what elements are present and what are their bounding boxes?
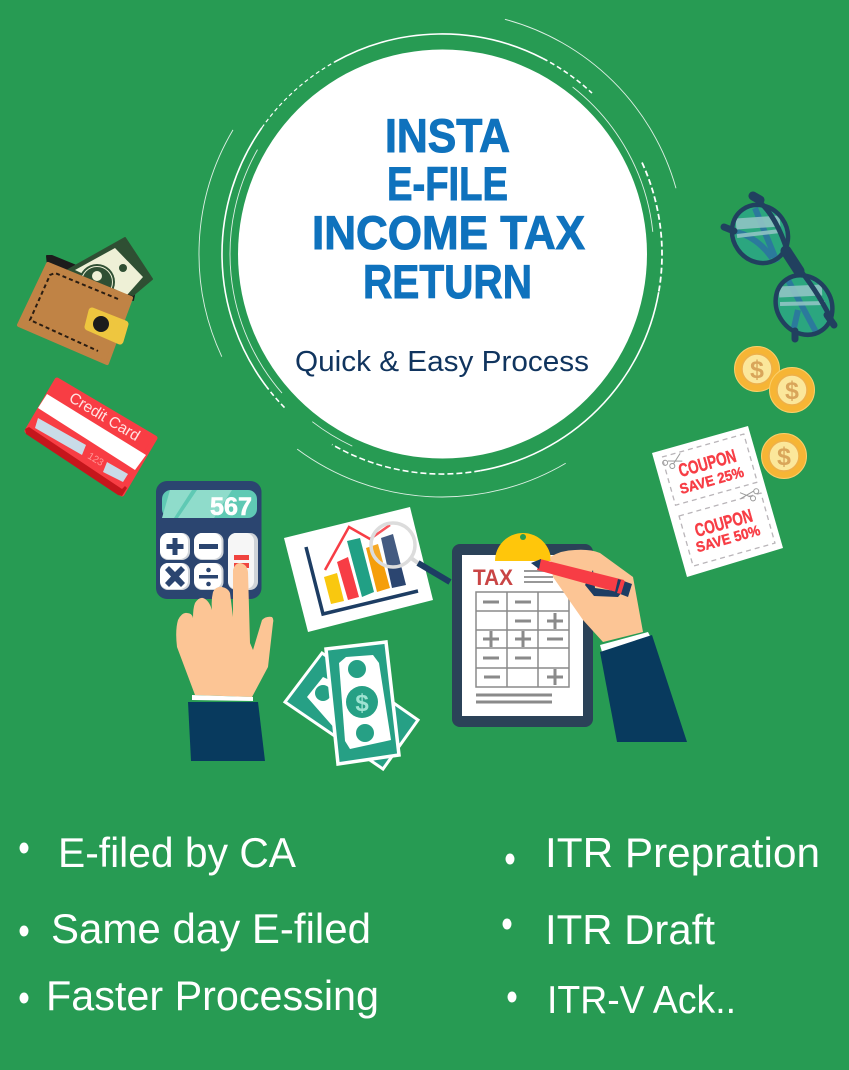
icon: coin three: [762, 434, 806, 478]
feature list: left column: E-filed by CA: [58, 829, 296, 876]
icon: credit card: [25, 380, 155, 496]
feature list: right column: ITR-V Ack..: [547, 979, 736, 1022]
clipboard with tax form: TAX: [473, 565, 513, 590]
title: RETURN: [363, 255, 532, 308]
feature list: left column: [20, 829, 379, 1019]
icon: credit card: 123: [85, 451, 106, 469]
icon: coin two: $: [785, 377, 799, 405]
feature list: left column: Same day E-filed: [51, 905, 371, 952]
hand pressing calculator: [176, 563, 273, 761]
icon: coin one: $: [750, 356, 764, 384]
coupons: SAVE 25%: [678, 465, 746, 498]
central white circle: [238, 50, 647, 458]
feature list: right column: [502, 829, 820, 1022]
banknotes: $: [355, 690, 369, 717]
title: INCOME TAX: [312, 206, 585, 259]
icon: calculator: 567: [210, 493, 252, 521]
icon: glasses: [721, 194, 844, 346]
banknotes: [285, 642, 418, 769]
feature list: right column: ITR Prepration: [545, 829, 820, 876]
icon: coin two: [770, 368, 814, 412]
icon: coin three: $: [777, 443, 791, 471]
bar chart sheet with magnifier: [284, 507, 450, 632]
icon: calculator: [156, 481, 262, 599]
title: E-FILE: [387, 157, 508, 210]
icon: credit card: Credit Card: [66, 389, 143, 445]
title: [312, 109, 585, 308]
feature list: right column: ITR Draft: [545, 906, 715, 953]
subtitle: Quick & Easy Process: [295, 346, 589, 378]
title: INSTA: [385, 109, 510, 162]
clipboard with tax form: [452, 533, 593, 727]
decorative rings around central circle: [199, 19, 676, 497]
icon: wallet: [19, 238, 152, 363]
hand writing with red pen: [531, 550, 687, 742]
coupons: COUPON: [676, 445, 738, 481]
icon: coin one: [734, 346, 780, 392]
coupons: SAVE 50%: [694, 523, 762, 556]
feature list: left column: Faster Processing: [46, 972, 379, 1019]
coupons: [652, 426, 783, 577]
coupons: COUPON: [692, 505, 755, 541]
